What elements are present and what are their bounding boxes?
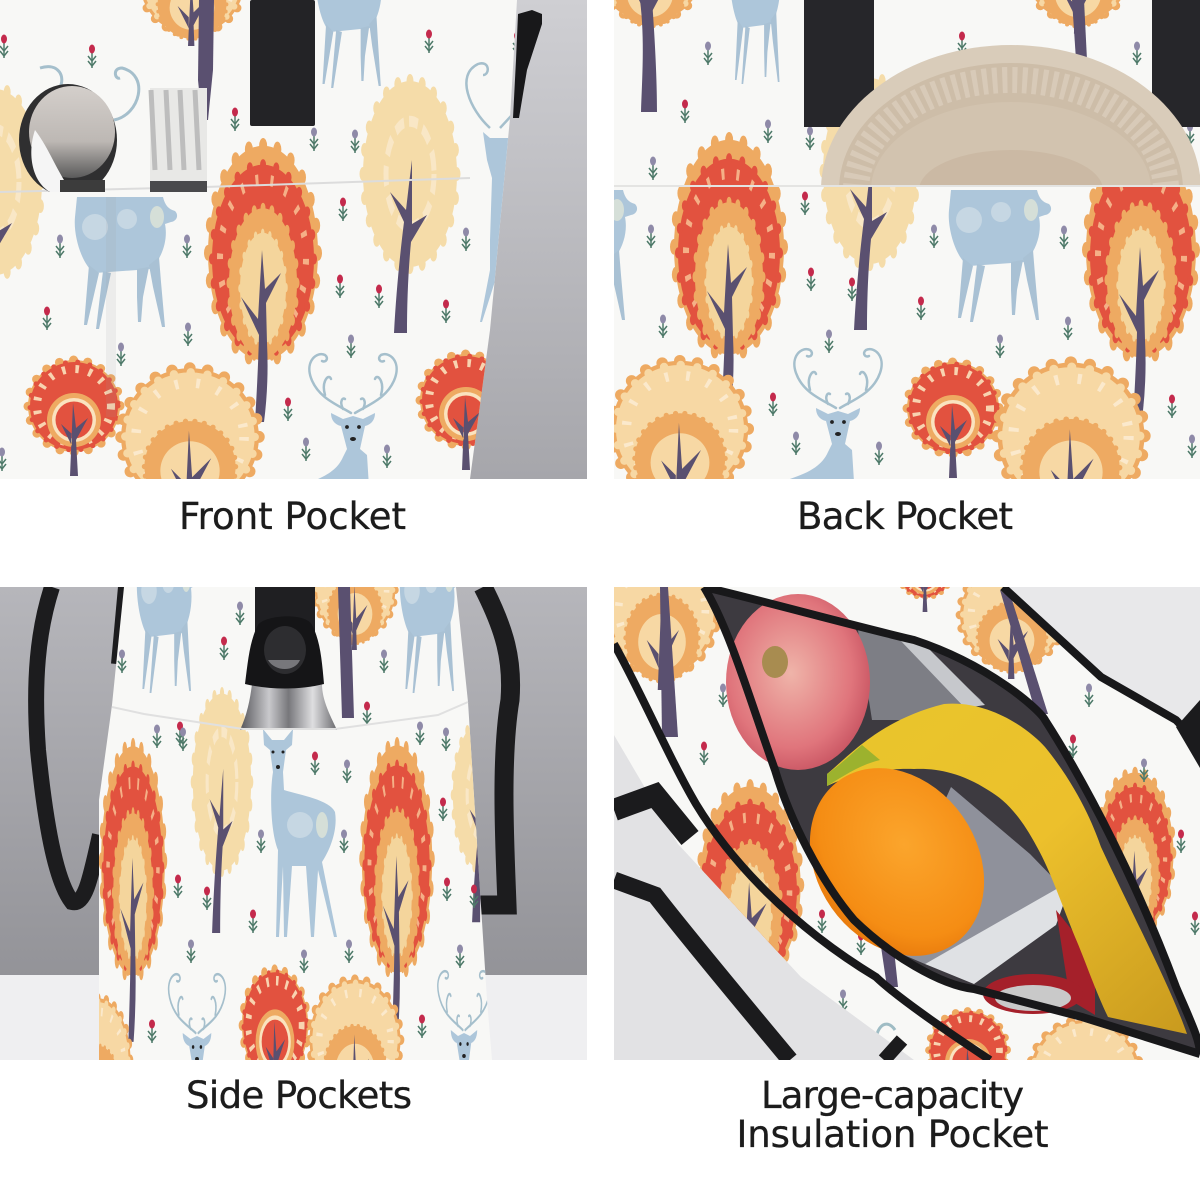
soft fold shadow xyxy=(106,220,116,417)
heading: front pocket: Front Pocket xyxy=(179,495,406,538)
front strap xyxy=(255,587,315,632)
bag pattern xyxy=(614,0,1200,479)
heading: large-capacity insulation pocket xyxy=(736,1074,1048,1156)
bag interior opening xyxy=(704,587,1200,1054)
floor xyxy=(0,975,587,1060)
apple xyxy=(726,594,870,770)
bag straps xyxy=(614,795,902,1060)
food container xyxy=(857,624,1065,984)
heading: large-capacity insulation pocket: Large-capacity xyxy=(761,1074,1024,1117)
bag body xyxy=(614,587,1200,1060)
wall shadow xyxy=(614,735,914,1060)
zipper edges xyxy=(614,587,1200,1060)
straps behind bag xyxy=(36,587,511,905)
bag body xyxy=(0,0,517,479)
bag pattern xyxy=(0,0,521,522)
wall xyxy=(0,587,587,977)
pocket edge xyxy=(614,185,1200,187)
banana xyxy=(827,704,1187,1034)
straps xyxy=(804,0,1200,127)
spoon xyxy=(19,67,139,196)
strap xyxy=(250,0,315,126)
pocket edge xyxy=(112,702,468,729)
panel: side pockets xyxy=(0,587,587,1060)
wall background xyxy=(470,0,587,479)
fork xyxy=(150,88,207,192)
heading: back pocket: Back Pocket xyxy=(797,495,1013,538)
zipper pull xyxy=(513,10,542,118)
orange xyxy=(810,768,984,956)
fabric folds xyxy=(0,178,470,192)
panel: insulation pocket xyxy=(614,587,1200,1060)
paper plate xyxy=(821,45,1200,185)
water bottle xyxy=(240,616,337,730)
wall xyxy=(1009,587,1200,720)
panel: front pocket xyxy=(0,0,587,522)
bag pattern xyxy=(99,587,488,1060)
bag body xyxy=(614,0,1200,479)
panel: back pocket xyxy=(614,0,1200,479)
heading: side pockets: Side Pockets xyxy=(186,1074,412,1117)
banana stem xyxy=(827,745,880,786)
handle at right edge xyxy=(1176,700,1200,768)
heading: large-capacity insulation pocket: Insulation Pocket xyxy=(736,1113,1048,1156)
bag body xyxy=(99,587,492,1060)
bag pattern xyxy=(614,587,1200,1060)
deer standing xyxy=(263,729,337,937)
soda can xyxy=(983,910,1095,1015)
